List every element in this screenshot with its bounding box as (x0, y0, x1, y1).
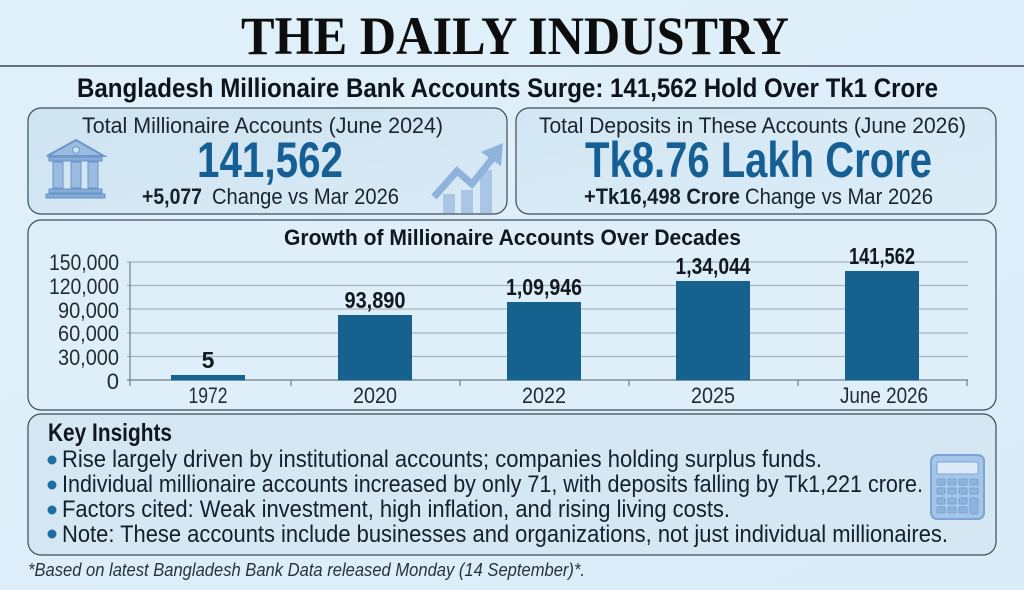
panel: total deposits (516, 108, 996, 214)
bar: June 2026: 141,562 (849, 243, 915, 269)
bar: 2025: 2025 (691, 383, 735, 408)
bar: June 2026: June 2026 (840, 383, 928, 408)
panel: total millionaire accounts (28, 108, 507, 214)
bar: 2022: 1,09,946 (506, 274, 582, 300)
panel heading: Total Millionaire Accounts (June 2024) (82, 113, 443, 138)
bar: 1972: 5 (202, 347, 215, 373)
bar: June 2026 (840, 243, 928, 408)
bar chart: 60,000 (58, 321, 119, 346)
bar chart: 90,000 (58, 298, 119, 323)
change (142, 184, 399, 209)
change: +5,077 (142, 184, 202, 209)
panel: key insights (28, 414, 996, 555)
bar: 2020 (338, 287, 412, 408)
bar: 2020: 93,890 (344, 287, 406, 313)
bar: 2022 (506, 274, 582, 408)
bar chart: 120,000 (49, 274, 119, 299)
bar chart: 0 (107, 369, 119, 394)
change: +Tk16,498 Crore (584, 184, 740, 209)
change: Change vs Mar 2026 (745, 184, 933, 209)
change (584, 184, 933, 209)
insight 4: Note: These accounts include businesses and organizations, not just individual millionaires. (62, 521, 948, 548)
panel: growth chart (28, 220, 996, 410)
icon: calculator (931, 455, 984, 519)
bar: 1972: 1972 (188, 383, 228, 408)
insights heading: Key Insights (48, 419, 172, 447)
chart heading: Growth of Millionaire Accounts Over Decades (284, 225, 741, 250)
bar chart: 150,000 (49, 250, 119, 275)
change: Change vs Mar 2026 (212, 184, 399, 209)
panel heading: Total Deposits in These Accounts (June 2026) (539, 113, 966, 138)
headline: Bangladesh Millionaire Bank Accounts Surge: 141,562 Hold Over Tk1 Crore (77, 73, 938, 103)
insight 3: Factors cited: Weak investment, high inflation, and rising living costs. (62, 496, 730, 523)
bar: 1972 (171, 347, 245, 408)
bar: 2020: 2020 (353, 383, 397, 408)
big number: 141,562 (197, 132, 343, 188)
bar: 2022: 2022 (522, 383, 566, 408)
big number: Tk8.76 Lakh Crore (585, 132, 932, 188)
title: THE DAILY INDUSTRY (241, 6, 789, 66)
bar: 2025: 1,34,044 (676, 253, 751, 279)
footnote: *Based on latest Bangladesh Bank Data released Monday (14 September)*. (28, 560, 585, 580)
insight 1: Rise largely driven by institutional accounts; companies holding surplus funds. (62, 446, 822, 473)
bar chart (49, 243, 968, 408)
bar chart: 30,000 (58, 345, 119, 370)
icon: bank building (46, 140, 105, 198)
icon: growth arrow (434, 143, 503, 213)
insight 2: Individual millionaire accounts increased by only 71, with deposits falling by Tk1,221 crore. (62, 471, 923, 498)
bar: 2025 (676, 253, 751, 408)
